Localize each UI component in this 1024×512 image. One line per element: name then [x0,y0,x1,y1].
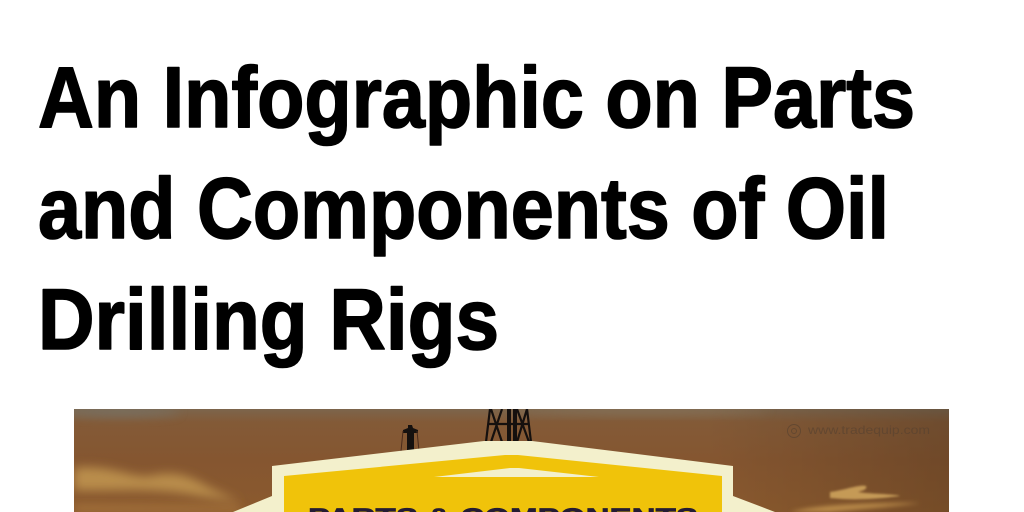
worker silhouette [401,425,419,451]
cream badge highlight [434,468,599,477]
title: and Components of Oil [38,161,889,257]
title [38,50,915,368]
cream badge outline [233,441,775,512]
infographic preview image [60,407,949,512]
oil derrick silhouette [486,409,531,442]
sunset sky background [60,407,949,512]
title: Drilling Rigs [38,272,499,368]
watermark: www.tradequip.com [807,423,930,437]
yellow badge panel [284,455,722,512]
title: An Infographic on Parts [38,50,915,146]
